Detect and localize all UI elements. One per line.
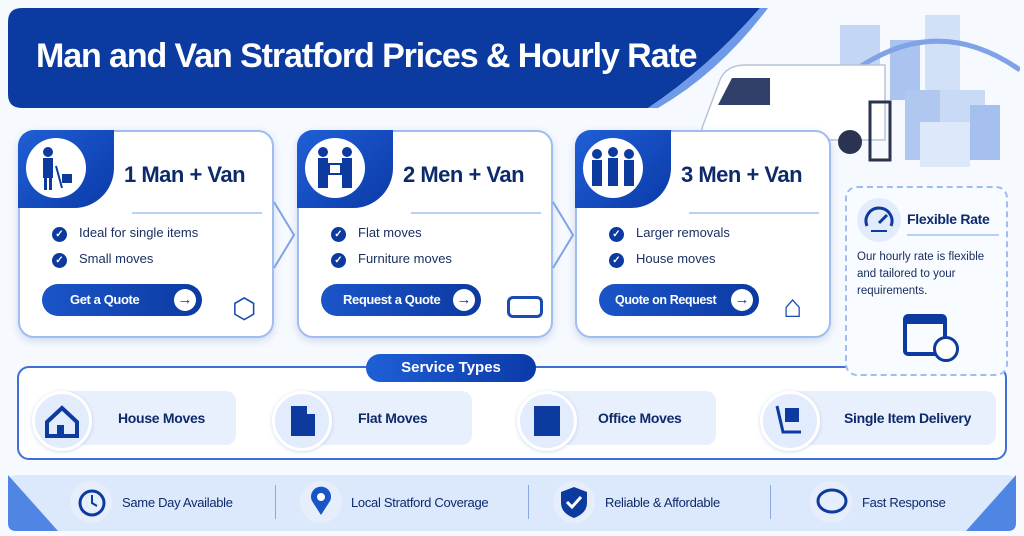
- service: flat moves: Flat Moves: [358, 410, 427, 426]
- icon: box: ⬡: [232, 293, 256, 324]
- icon: gauge: [857, 198, 901, 242]
- card: 2 men + van: Request a Quote: [343, 292, 440, 307]
- card: 1 man + van: Ideal for single items: [79, 225, 198, 240]
- text: Same Day Available: [122, 495, 233, 510]
- feature: fast response: [810, 481, 852, 523]
- illustration: van and city: [701, 15, 1020, 167]
- heading: service types: Service Types: [401, 359, 501, 376]
- card: 2 men + van: 2 Men + Van: [403, 162, 524, 187]
- icon: calendar clock: [903, 314, 947, 356]
- card: 3 men + van: House moves: [636, 251, 715, 266]
- title banner: [8, 8, 768, 108]
- service: office moves: [540, 391, 716, 445]
- card: 3 men + van: Quote on Request: [615, 293, 716, 307]
- feature: local coverage: [300, 481, 342, 523]
- text: Reliable & Affordable: [605, 495, 720, 510]
- card: 3 men + van: [575, 130, 831, 338]
- card: 1 man + van: 1 Man + Van: [124, 162, 245, 187]
- service: flat moves: [300, 391, 472, 445]
- card: 3 men + van: 3 Men + Van: [681, 162, 802, 187]
- card: 2 men + van: →: [456, 291, 472, 308]
- bottom bar: features: [8, 475, 1016, 531]
- text: Fast Response: [862, 495, 946, 510]
- card: 2 men + van: Flat moves: [358, 225, 422, 240]
- title banner: Man and Van Stratford Prices & Hourly Rate: [36, 37, 696, 75]
- arrows between cards: [273, 202, 296, 268]
- card: 2 men + van: Furniture moves: [358, 251, 452, 266]
- card: 3 men + van: ⌂: [783, 288, 802, 324]
- button: Get a Quote: [70, 292, 139, 307]
- text: Local Stratford Coverage: [351, 495, 488, 510]
- card: 2 men + van: [297, 130, 553, 338]
- button: →: [178, 291, 192, 308]
- panel: service types: [17, 366, 1007, 460]
- card: 3 men + van: Larger removals: [636, 225, 730, 240]
- service: single item delivery: [790, 391, 996, 445]
- service: house moves: [60, 391, 236, 445]
- panel: flexible rate: [845, 186, 1008, 376]
- feature: same day: [70, 481, 112, 523]
- feature: reliable: [553, 481, 595, 523]
- button: [42, 284, 202, 316]
- card: 3 men + van: →: [734, 291, 750, 308]
- service: office moves: Office Moves: [598, 410, 682, 426]
- card: 1 man + van: [18, 130, 274, 338]
- card: 1 man + van: Small moves: [79, 251, 153, 266]
- panel: flexible rate: Flexible Rate: [907, 211, 989, 227]
- heading: service types: [366, 354, 536, 382]
- panel: flexible rate: Our hourly rate is flexible and tailored to your requirements.: [857, 251, 984, 297]
- icon: man with trolley: [18, 130, 114, 208]
- service: house moves: House Moves: [118, 410, 205, 426]
- service: single item delivery: Single Item Delivery: [844, 410, 971, 426]
